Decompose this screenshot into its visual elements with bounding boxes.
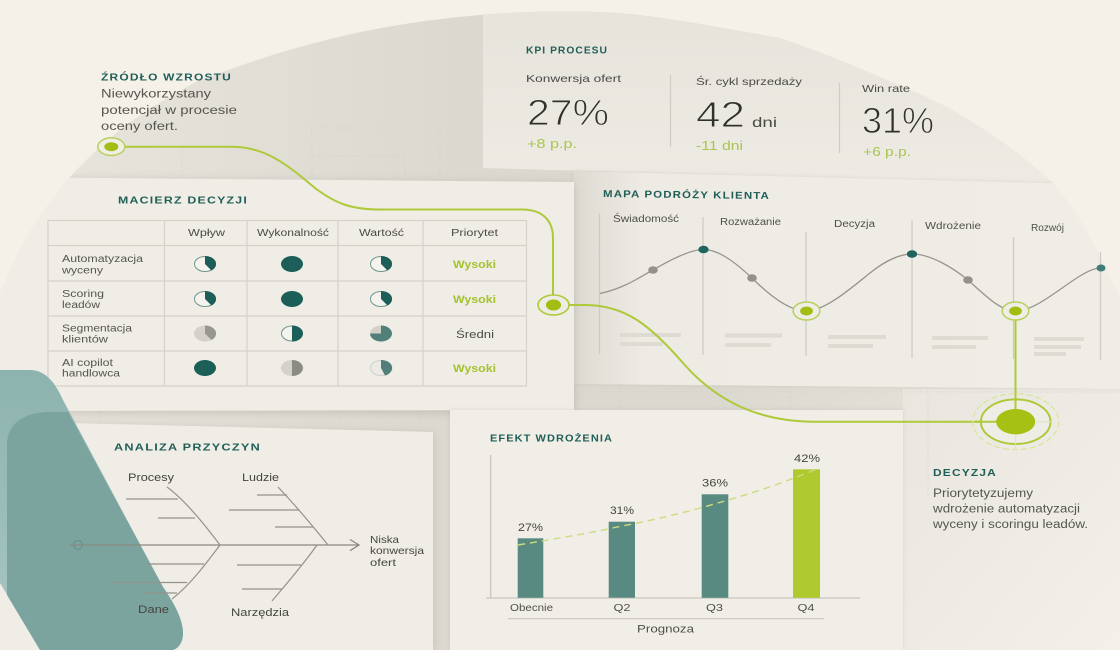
kpi: konwersja ofert	[526, 73, 621, 151]
stage labels: Wdrożenie	[925, 221, 981, 232]
panel: KPI	[483, 12, 1050, 182]
fishbone labels: Ludzie	[242, 472, 279, 484]
decorative teal shape	[0, 370, 183, 650]
lower right backdrop	[903, 389, 1120, 650]
heading: mapa podróży: MAPA PODRÓŻY KLIENTA	[603, 187, 770, 202]
bar chart: Prognoza	[637, 624, 695, 636]
table headers: Wartość	[359, 228, 404, 239]
node: źródło wzrostu	[98, 138, 125, 156]
row labels	[61, 254, 144, 380]
bar chart: 27%	[518, 522, 543, 534]
priority labels: Wysoki	[453, 294, 496, 306]
row labels: Segmentacja	[62, 324, 133, 334]
row labels: handlowca	[62, 368, 121, 380]
priority labels: Wysoki	[453, 363, 496, 375]
harvey balls	[194, 256, 392, 376]
kpi: konwersja ofert: 27%	[527, 92, 609, 133]
panel: mapa podróży klienta	[573, 171, 1120, 389]
stage labels: Decyzja	[834, 219, 875, 230]
kpi: konwersja ofert: +8 p.p.	[527, 136, 577, 151]
table grid	[48, 220, 526, 386]
row labels: leadów	[62, 300, 101, 311]
text block: źródło wzrostu: ŹRÓDŁO WZROSTU	[101, 70, 232, 84]
text block: decyzja: wyceny i scoringu leadów.	[932, 519, 1088, 531]
text block: decyzja	[932, 468, 1088, 531]
text block: decyzja: wdrożenie automatyzacji	[932, 504, 1080, 516]
fishbone labels: Niska	[370, 534, 399, 546]
curve dots	[648, 246, 1106, 284]
priority labels: Wysoki	[453, 259, 496, 271]
bar chart: Q3	[706, 602, 723, 614]
kpi: win rate: 31%	[862, 100, 934, 141]
heading: analiza przyczyn: ANALIZA PRZYCZYN	[114, 442, 261, 454]
bar chart: 42%	[794, 453, 820, 465]
row labels: Scoring	[62, 289, 104, 300]
panel: efekt wdrożenia	[450, 410, 903, 650]
panel background: KPI	[483, 12, 1050, 182]
text block: źródło wzrostu: oceny ofert.	[101, 121, 178, 133]
fishbone labels: konwersja	[370, 545, 424, 557]
kpi: średni cykl sprzedaży: Śr. cykl sprzedaży	[696, 75, 803, 88]
priority labels: Średni	[456, 328, 494, 341]
kpi: średni cykl sprzedaży: 42	[696, 94, 745, 135]
panel background: journey	[573, 171, 1120, 389]
kpi: win rate: Win rate	[862, 83, 910, 95]
node: decision target	[973, 394, 1059, 450]
stage labels	[613, 212, 1064, 234]
fishbone labels: Narzędzia	[231, 607, 290, 619]
text block: źródło wzrostu: Niewykorzystany	[101, 88, 211, 100]
kpi: średni cykl sprzedaży	[696, 75, 803, 153]
row labels: klientów	[62, 334, 109, 346]
node: matrix junction	[538, 295, 569, 315]
row labels: AI copilot	[62, 358, 113, 369]
bar chart: Obecnie	[510, 602, 553, 614]
table headers: Wpływ	[188, 228, 226, 239]
panel: analiza przyczyn background	[0, 423, 433, 650]
kpi: konwersja ofert: Konwersja ofert	[526, 73, 621, 85]
row labels: Automatyzacja	[62, 254, 144, 265]
node: decyzja stage	[793, 302, 820, 320]
green connector routes	[125, 147, 1016, 422]
panel: analiza przyczyn	[70, 442, 424, 619]
kpi: średni cykl sprzedaży: -11 dni	[696, 138, 743, 153]
text block: decyzja: DECYZJA	[933, 468, 997, 479]
fishbone labels: Procesy	[128, 472, 175, 484]
text block: decyzja: Priorytetyzujemy	[933, 488, 1033, 500]
kpi: win rate	[862, 83, 934, 159]
table headers: Priorytet	[451, 228, 498, 239]
stage labels: Rozwój	[1031, 223, 1064, 234]
table headers	[188, 228, 498, 239]
journey curve	[600, 250, 1101, 311]
heading: KPI procesu: KPI PROCESU	[526, 46, 608, 56]
heading: efekt wdrożenia: EFEKT WDROŻENIA	[490, 432, 613, 444]
panel background: matrix	[0, 177, 574, 411]
table headers: Wykonalność	[257, 228, 329, 239]
panel: macierz decyzji	[0, 177, 574, 411]
priority labels	[453, 259, 496, 375]
fishbone diagram	[70, 487, 359, 601]
bar chart: Q2	[614, 602, 631, 614]
stage labels: Świadomość	[613, 212, 679, 225]
node: rozwój stage	[1002, 302, 1029, 320]
fishbone labels: Dane	[138, 604, 169, 616]
kpi: win rate: +6 p.p.	[863, 144, 911, 159]
row labels: wyceny	[61, 266, 103, 276]
panel background: effect	[450, 410, 903, 650]
kpi: średni cykl sprzedaży: dni	[752, 114, 777, 130]
text block: źródło wzrostu	[101, 70, 237, 133]
fishbone labels: ofert	[370, 557, 396, 569]
bar chart: Q4	[798, 602, 815, 614]
stage labels: Rozważanie	[720, 217, 781, 228]
bar chart	[486, 453, 860, 636]
bar chart: 36%	[702, 478, 728, 490]
bar chart: 31%	[610, 505, 634, 517]
heading: macierz decyzji: MACIERZ DECYZJI	[118, 196, 248, 206]
placeholder text bars	[620, 333, 1084, 356]
text block: źródło wzrostu: potencjał w procesie	[101, 105, 237, 117]
fishbone labels	[128, 472, 424, 619]
